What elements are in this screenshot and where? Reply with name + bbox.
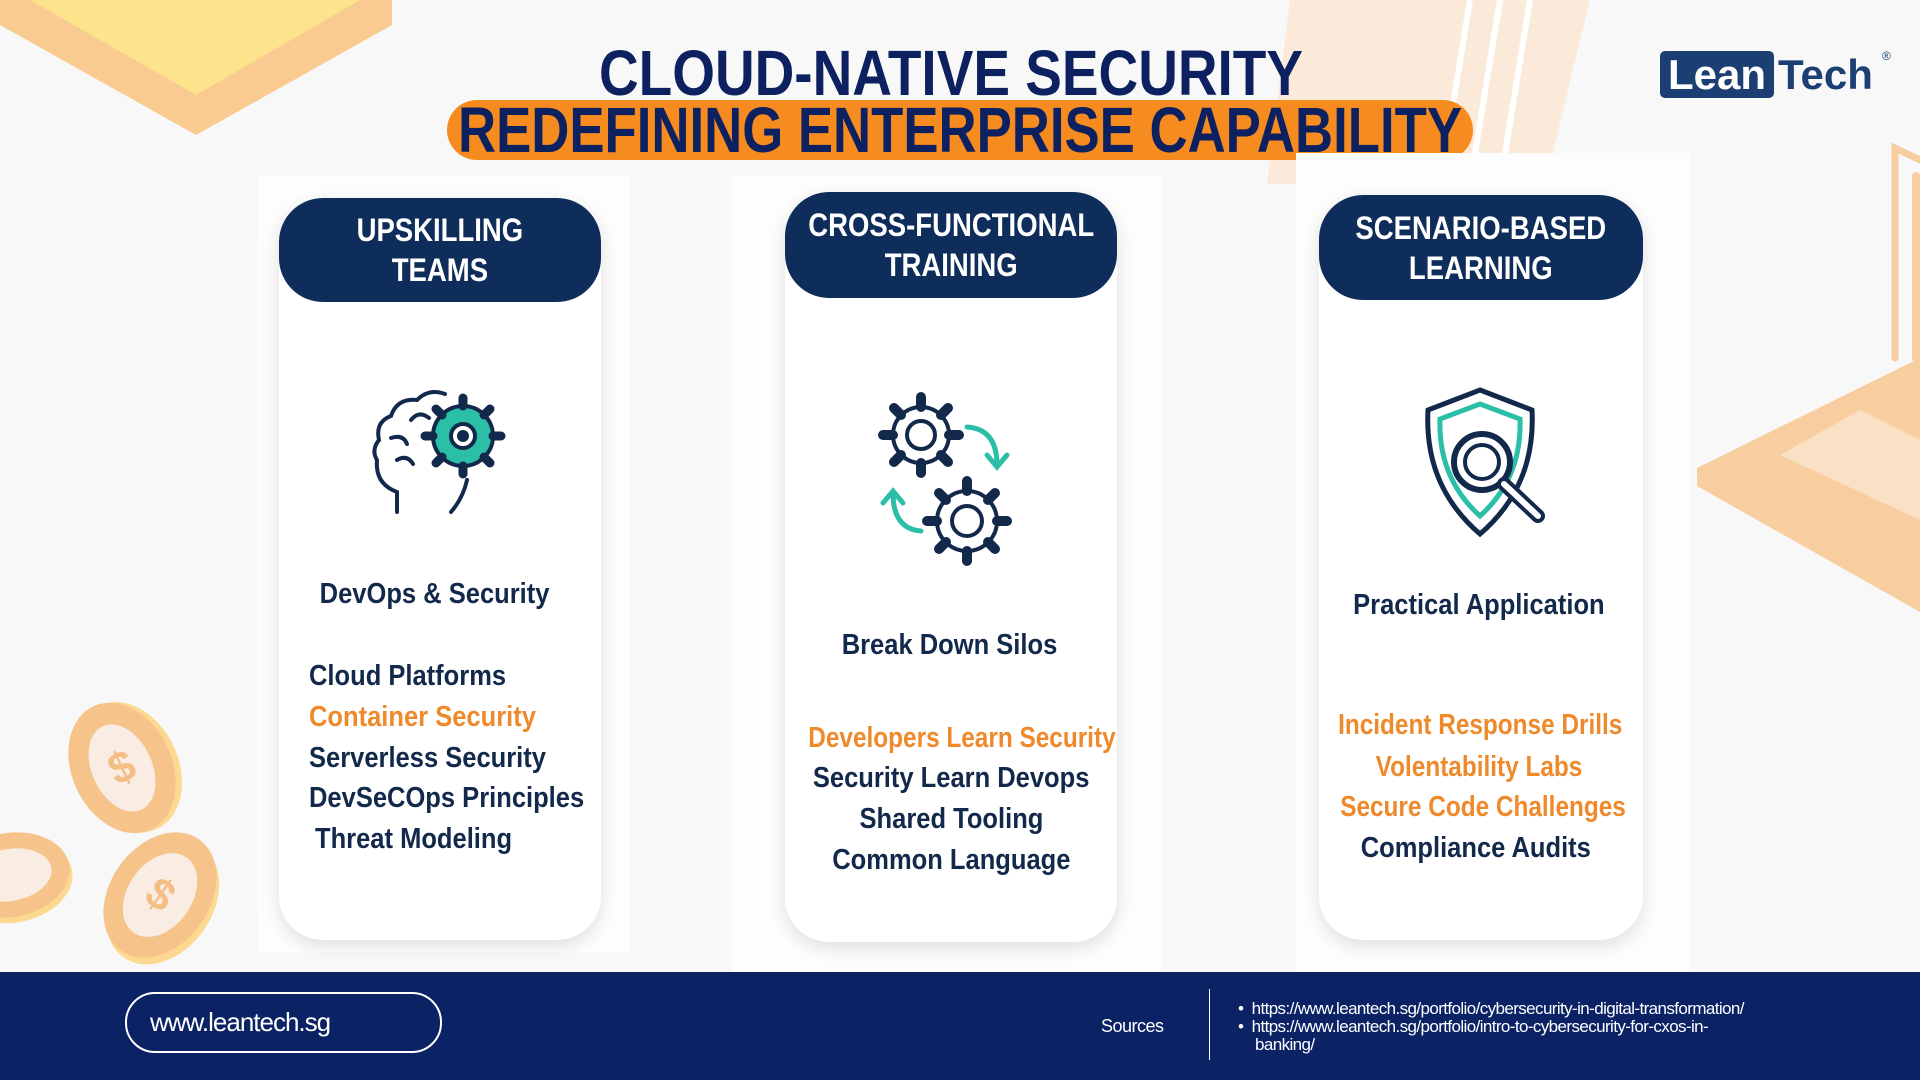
source links: • https://www.leantech.sg/portfolio/cybersecurity-in-digital-transformation/ (1238, 999, 1744, 1018)
header: TRAINING (884, 247, 1018, 283)
logo: ® (1882, 49, 1891, 63)
header: LEARNING (1409, 250, 1553, 286)
list: Shared Tooling (859, 803, 1043, 835)
source links: banking/ (1255, 1035, 1314, 1054)
list: DevSeCOps Principles (309, 782, 584, 814)
panel: cross-functional training (785, 192, 1117, 942)
list (1338, 709, 1626, 864)
list: Developers Learn Security (808, 722, 1116, 754)
title (447, 40, 1473, 165)
icon: brain gear (372, 390, 506, 514)
subheading: DevOps & Security (320, 578, 550, 610)
list: Serverless Security (309, 742, 546, 774)
list: Security Learn Devops (813, 762, 1089, 794)
coins: $ (100, 740, 143, 795)
list: Volentability Labs (1376, 751, 1582, 783)
source links: • https://www.leantech.sg/portfolio/intro-to-cybersecurity-for-cxos-in- (1238, 1017, 1708, 1036)
url pill (125, 992, 442, 1053)
list (309, 660, 584, 855)
list: Common Language (832, 844, 1070, 876)
panel backgrounds (257, 175, 631, 953)
coins (0, 702, 220, 964)
logo (1660, 49, 1891, 98)
list: Compliance Audits (1361, 832, 1591, 864)
logo: Tech (1778, 51, 1873, 98)
subheading: Practical Application (1353, 589, 1605, 621)
icon: gears with arrows (878, 392, 1012, 566)
panel: upskilling teams (279, 198, 601, 940)
header: CROSS-FUNCTIONAL (808, 207, 1094, 243)
header (785, 192, 1117, 298)
source links (1238, 999, 1744, 1054)
logo: Lean (1668, 51, 1766, 98)
subheading: Break Down Silos (841, 629, 1057, 661)
list: Cloud Platforms (309, 660, 506, 692)
header (1319, 195, 1643, 300)
url pill: www.leantech.sg (150, 1007, 330, 1037)
header: SCENARIO-BASED (1356, 210, 1606, 246)
header: TEAMS (392, 252, 488, 288)
list (808, 722, 1116, 876)
footer (0, 972, 1920, 1080)
icon: shield magnifier (1425, 387, 1545, 538)
list: Incident Response Drills (1338, 709, 1622, 741)
list: Secure Code Challenges (1340, 791, 1626, 823)
header: UPSKILLING (357, 212, 523, 248)
header (279, 198, 601, 302)
list: Container Security (309, 701, 536, 733)
coins: $ (136, 867, 184, 922)
list: Threat Modeling (315, 823, 512, 855)
sources label: Sources (1101, 1016, 1164, 1036)
panel: scenario-based learning (1319, 195, 1643, 940)
